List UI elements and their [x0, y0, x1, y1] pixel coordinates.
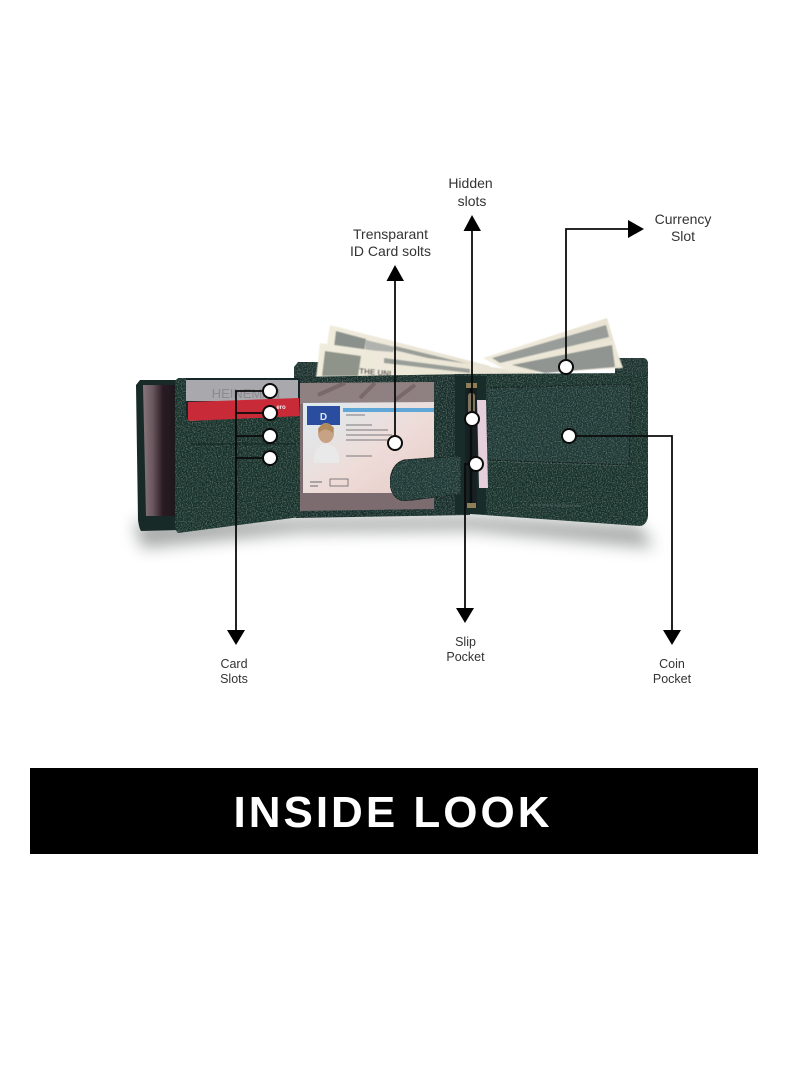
wallet photo: [134, 318, 654, 548]
left card panel: ero: [276, 405, 286, 411]
arrow: currency slot: [628, 220, 644, 238]
label: hidden slots: slots: [458, 193, 486, 209]
label: transparent ID card slots: Trensparant: [353, 226, 428, 242]
banknotes: THE UNI: [359, 367, 392, 378]
red card: [188, 398, 300, 421]
left card panel: HEINEMAN: [212, 386, 280, 401]
label: slip pocket: Slip: [455, 635, 476, 649]
left card panel: [175, 378, 300, 533]
label: currency slot: Currency: [655, 211, 711, 227]
banner heading: INSIDE LOOK: [233, 788, 553, 837]
strap: [390, 456, 461, 501]
label: transparent ID card slots: ID Card solts: [350, 243, 431, 259]
arrow: hidden slots: [464, 215, 481, 231]
label: slip pocket: Pocket: [446, 650, 485, 664]
zip and slip pocket: [455, 376, 488, 514]
banknotes: [316, 318, 623, 378]
brand stamp: [530, 505, 582, 506]
callout dots: [263, 360, 576, 471]
ID card: D: [320, 412, 327, 423]
callout lines: [236, 229, 672, 631]
ID window: [300, 382, 434, 511]
coin pocket flap: [487, 384, 631, 465]
label: card slots: Slots: [220, 672, 248, 686]
back flap tab: [294, 362, 335, 380]
label: card slots: Card: [220, 657, 248, 671]
wallet shadow: [134, 516, 654, 548]
label: currency slot: Slot: [671, 228, 695, 244]
banner: inside look: [30, 768, 758, 854]
arrow: slip pocket: [456, 608, 474, 623]
label: coin pocket: Coin: [659, 657, 685, 671]
arrow: coin pocket: [663, 630, 681, 645]
arrow: card slots: [227, 630, 245, 645]
left outer flap: [136, 380, 180, 531]
right back tab: [615, 358, 648, 380]
label: hidden slots: Hidden: [448, 175, 493, 191]
ID card: [303, 402, 434, 493]
right section of wallet: [455, 373, 648, 526]
label: coin pocket: Pocket: [653, 672, 692, 686]
grey card: [186, 380, 298, 401]
arrow: ID card slots: [386, 265, 404, 281]
center section: [296, 374, 470, 518]
